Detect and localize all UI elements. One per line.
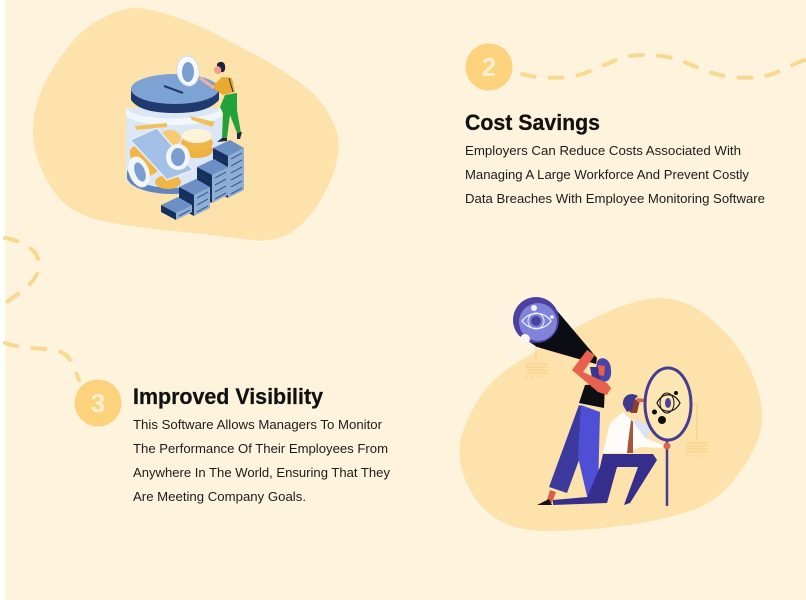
badge: number 2: 2 [482,52,496,82]
illustration: savings jar with coins [124,55,244,220]
man at mirror [553,394,663,505]
server stacks [161,140,244,220]
text block: improved visibility description: Are Meeting Company Goals. [133,489,306,504]
text block: improved visibility description: The Performance Of Their Employees From [133,441,388,456]
badge: number 3 [74,380,122,426]
dashed connector: from badge 2 [522,55,805,78]
coin at jar edge [124,154,154,190]
heading: cost savings: Cost Savings [465,110,600,135]
blob: top left background [33,8,339,241]
climbing man [200,62,242,142]
text block: cost savings description [465,143,765,206]
badge: number 2 [466,44,512,90]
blob: bottom right background [459,298,762,531]
text block: cost savings description: Employers Can Reduce Costs Associated With [465,143,741,158]
coin in jar [166,144,190,170]
dashed connector: to badge 3 [5,343,79,380]
telescope [513,297,597,364]
banknote [130,128,193,180]
faint label: telescope note [526,345,548,377]
section: cost savings [465,110,765,206]
dashed connector: left loop [5,238,39,302]
heading: improved visibility: Improved Visibility [133,384,324,409]
section: improved visibility [133,384,390,504]
text block: improved visibility description: Anywhere In The World, Ensuring That They [133,465,390,480]
jar body [126,108,222,194]
text block: cost savings description: Data Breaches With Employee Monitoring Software [465,191,765,206]
mirror with eye [645,368,691,506]
coin above slot [175,55,201,87]
text block: improved visibility description: This Software Allows Managers To Monitor [133,417,383,432]
text block: improved visibility description [133,417,390,504]
jar lid [131,74,219,113]
badge: number 3: 3 [91,388,105,418]
woman with telescope [537,350,611,505]
text block: cost savings description: Managing A Large Workforce And Prevent Costly [465,167,749,182]
faint label: mirror note [686,404,708,456]
illustration: telescope and mirror team [513,297,708,506]
